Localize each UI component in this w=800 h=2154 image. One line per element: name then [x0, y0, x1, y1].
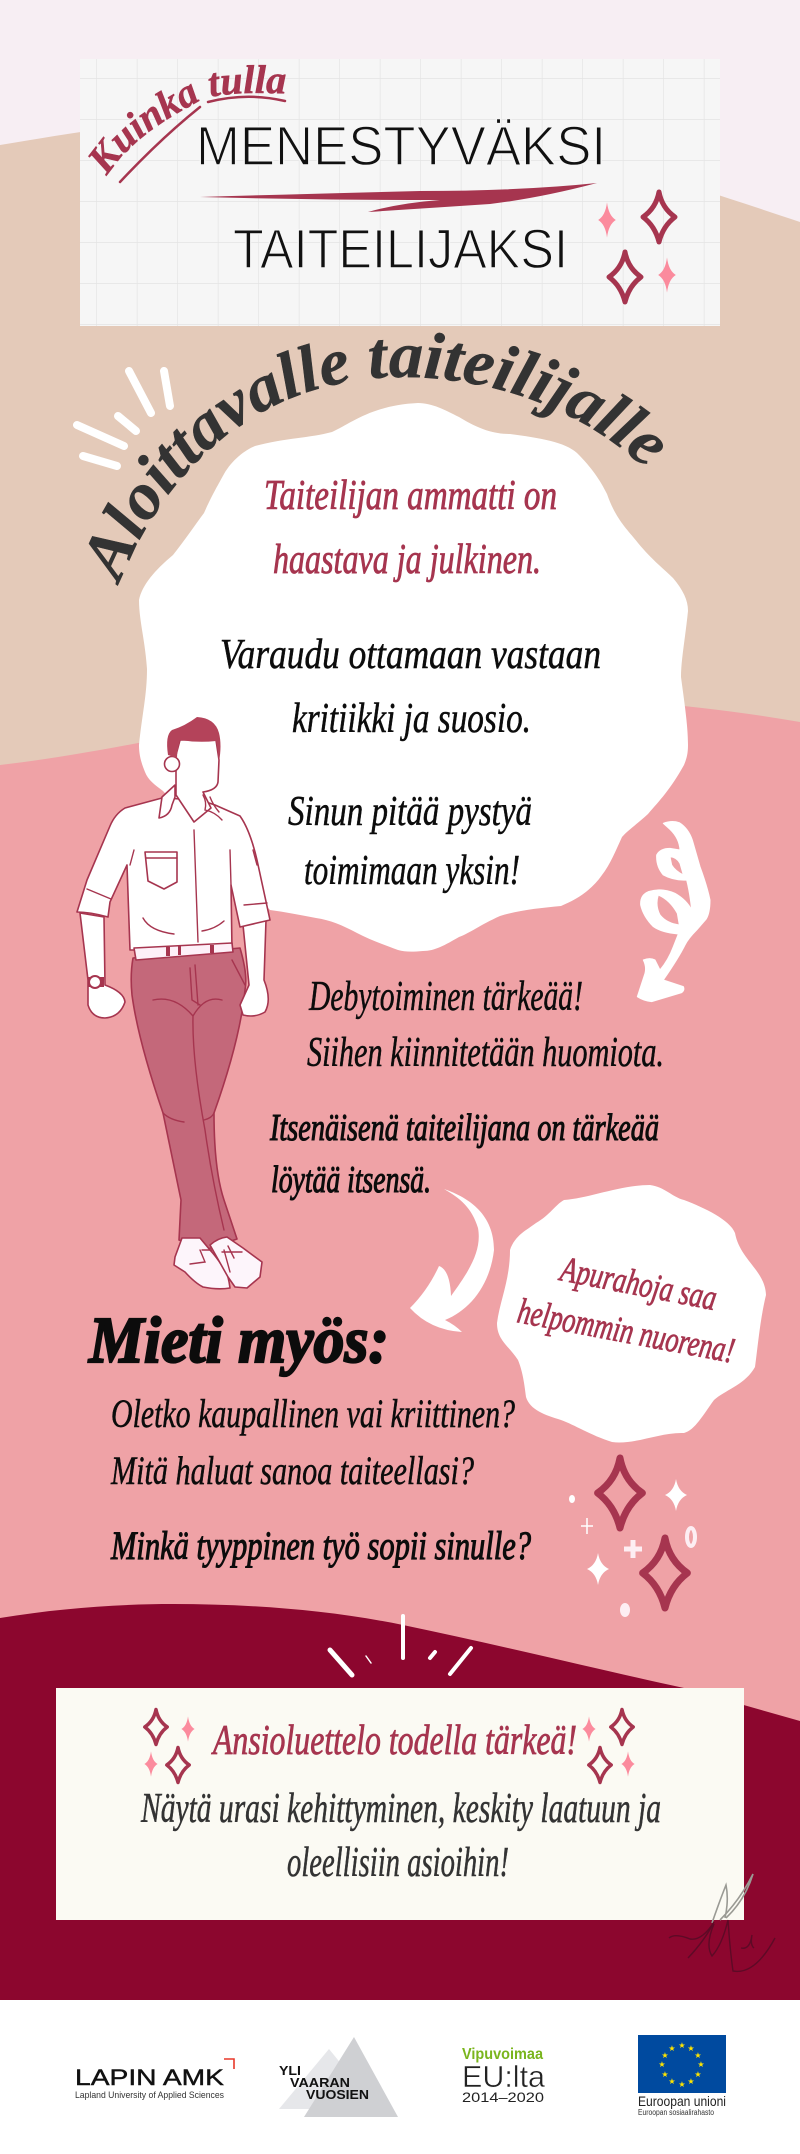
logo: EU flag: ★: [658, 2060, 666, 2069]
logo: EU flag: Euroopan sosiaalirahasto: [638, 2108, 714, 2117]
blob text: red heading: Taiteilijan ammatti on: [264, 473, 557, 519]
title: MENESTYVÄKSI: MENESTYVÄKSI: [196, 114, 606, 177]
figure: belt: [134, 943, 233, 960]
figure: watch: [88, 976, 104, 988]
white blob: grants: [497, 1185, 766, 1442]
rays: above card: [330, 1616, 471, 1675]
logo: Yli vaaran vuosien: VAARAN: [290, 2075, 350, 2090]
logo: EU flag: ★: [668, 2044, 676, 2053]
logo: EU flag: ★: [678, 2041, 686, 2050]
logo: EU flag: ★: [687, 2077, 695, 2086]
background: white footer: [0, 2000, 800, 2154]
logo: Vipuvoimaa EU:lta: 2014–2020: [462, 2089, 544, 2105]
logo: EU flag: ★: [661, 2070, 669, 2079]
blob text: red heading: [264, 473, 557, 583]
figure: hair: [167, 717, 220, 762]
blob text: criticism: [220, 632, 601, 742]
card heading: Ansioluettelo todella tärkeä!: [211, 1718, 577, 1764]
text: debut: Siihen kiinnitetään huomiota.: [307, 1030, 664, 1076]
logo: Vipuvoimaa EU:lta: Vipuvoimaa: [462, 2046, 543, 2063]
logo: EU flag: ★: [694, 2051, 702, 2060]
questions list: Oletko kaupallinen vai kriittinen?: [111, 1391, 515, 1436]
blob text: grants: [515, 1248, 738, 1371]
background: pink wave: [0, 699, 800, 1800]
figure: man standing: [77, 717, 270, 1289]
white blob: main speech: [139, 403, 688, 952]
title: Kuinka tulla: Kuinka tulla: [88, 64, 286, 176]
signature: [669, 1874, 775, 1971]
logo: EU flag: Euroopan unioni: [638, 2093, 726, 2109]
figure: right shoe: [210, 1237, 262, 1288]
figure: left forearm and hand: [80, 913, 125, 1018]
blob text: alone: Sinun pitää pystyä: [288, 789, 532, 835]
sparkles: lower right: [569, 1458, 695, 1617]
figure: collar: [159, 785, 175, 818]
title panel: [80, 59, 720, 326]
text: independent artist: Itsenäisenä taiteilijana on tärkeää: [269, 1107, 659, 1149]
title brush stroke: [200, 183, 597, 212]
blob text: grants: Apurahoja saa: [556, 1248, 720, 1318]
logo: EU flag: ★: [678, 2080, 686, 2089]
logo: EU flag: ★: [687, 2044, 695, 2053]
heading: Mieti myös: Mieti myös:: [88, 1304, 389, 1377]
questions list: Minkä tyyppinen työ sopii sinulle?: [110, 1523, 531, 1568]
blob text: criticism: Varaudu ottamaan vastaan: [220, 632, 601, 678]
blob text: alone: [288, 789, 532, 894]
figure: left shoe: [174, 1238, 230, 1289]
logo: Yli vaaran vuosien: VUOSIEN: [306, 2087, 369, 2102]
arrow: curly: [637, 821, 710, 1002]
questions list: [110, 1391, 531, 1568]
logo: EU flag: ★: [694, 2070, 702, 2079]
logo: Vipuvoimaa EU:lta: [462, 2046, 546, 2105]
card sparkles: [144, 1710, 635, 1782]
figure: pants: [131, 948, 246, 1250]
figure: ear: [164, 756, 180, 772]
logo: Yli vaaran vuosien: YLI: [279, 2063, 301, 2078]
sparkles: title: [598, 192, 676, 302]
figure: right forearm and hand: [240, 920, 268, 1016]
figure: neck and face: [176, 740, 219, 822]
logo: EU flag: ★: [668, 2077, 676, 2086]
logo: EU flag: [638, 2035, 726, 2117]
logo: Yli vaaran vuosien: [279, 2037, 398, 2117]
text: independent artist: [269, 1107, 659, 1201]
text: independent artist: löytää itsensä.: [271, 1159, 431, 1201]
blob text: criticism: kritiikki ja suosio.: [292, 696, 531, 742]
rays: top left: [77, 371, 170, 466]
logo: EU flag: ★: [697, 2060, 705, 2069]
questions list: Mitä haluat sanoa taiteellasi?: [110, 1448, 474, 1493]
figure: pocket: [145, 852, 177, 889]
logo: EU flag: ★: [661, 2051, 669, 2060]
figure: shirt: [77, 798, 270, 950]
arc heading: Aloittavalle taiteilijalle: Aloittavalle taiteilijalle: [88, 332, 663, 586]
logo: Lapin AMK: LAPIN AMK: [75, 2065, 224, 2090]
card body: [140, 1786, 661, 1886]
background: tan wave: [0, 110, 800, 800]
card body: oleellisiin asioihin!: [287, 1840, 509, 1886]
background: dark red wave: [0, 1604, 800, 2000]
logo: Vipuvoimaa EU:lta: EU:lta: [462, 2059, 546, 2094]
title: TAITEILIJAKSI: TAITEILIJAKSI: [233, 217, 568, 280]
blob text: red heading: haastava ja julkinen.: [273, 537, 541, 583]
blob text: alone: toimimaan yksin!: [304, 848, 520, 894]
cream card: [56, 1688, 744, 1920]
arrow: curved: [410, 1189, 494, 1332]
logo: Lapin AMK: Lapland University of Applied Sciences: [75, 2090, 224, 2101]
logo: Lapin AMK: [75, 2059, 234, 2101]
text: debut: Debytoiminen tärkeää!: [308, 974, 583, 1020]
text: debut: [307, 974, 664, 1076]
